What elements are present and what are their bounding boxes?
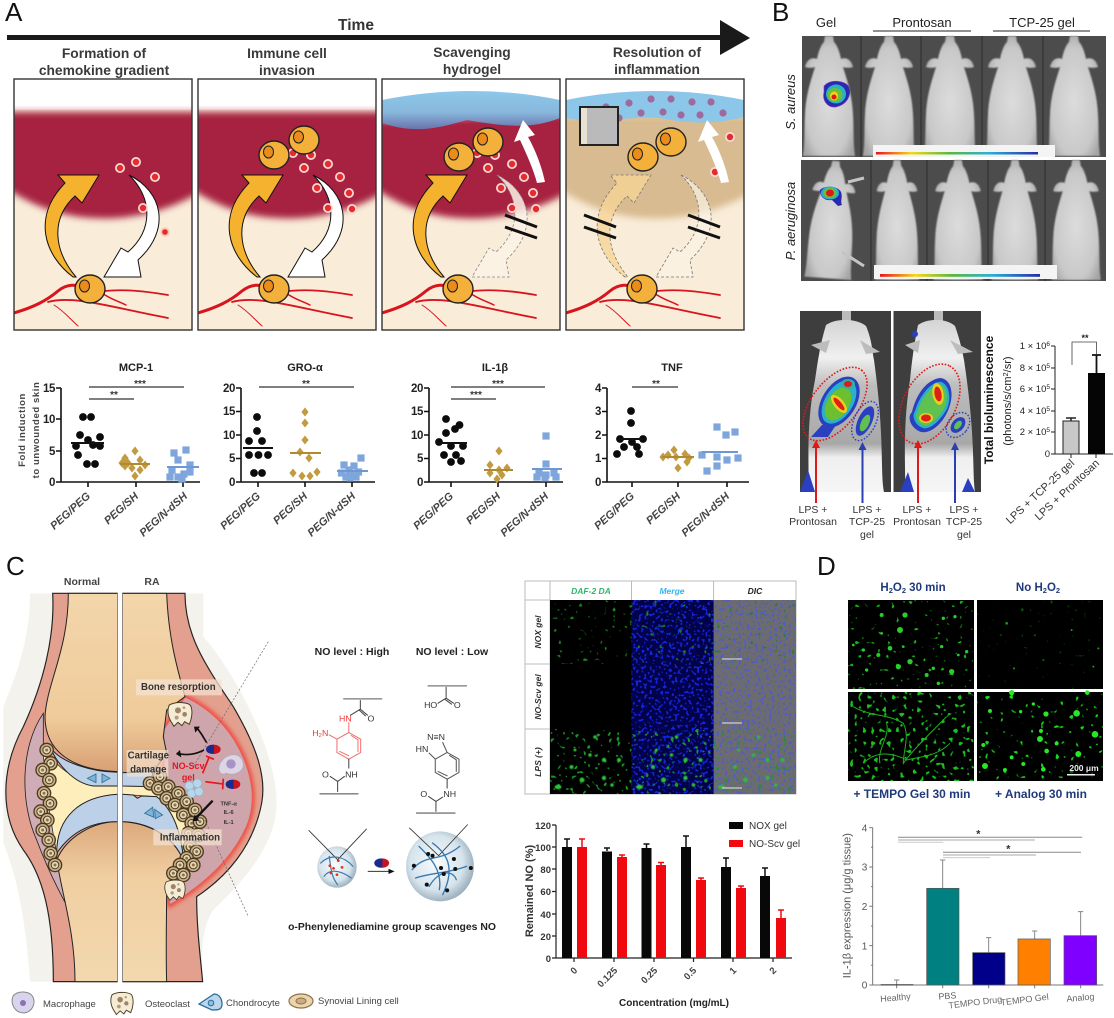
column titles: DAF-2 DA [571,586,611,596]
bar chart: total bioluminescence: 5 [1046,384,1050,391]
heat signal [886,354,975,454]
row titles: LPS (+) [533,747,543,777]
synovium right with inflamed glow [163,697,252,905]
merge column [632,600,714,794]
chart: GRO-alpha: 0 [229,477,235,489]
bones [45,593,185,982]
chondrocytes [87,774,163,819]
chart: TNF: 2 [595,430,601,442]
row titles: NO-Scv gel [533,674,543,720]
chart: GRO-alpha: 15 [223,406,236,418]
bar chart: remained NO: Concentration (mg/mL) [619,998,729,1009]
heading: stage 2: Immune cell [247,46,327,61]
heading: RA: RA [144,576,160,588]
panel: immune cell invasion [188,79,386,330]
image: no H2O2 [977,600,1103,689]
macrophage [219,755,243,774]
bar chart: remained NO: 100 [535,843,551,854]
label: cartilage damage: damage [130,765,167,776]
chart: IL-1 beta: 0 [417,477,423,489]
black bars [562,847,770,958]
image captions top: No H [1016,582,1043,594]
colour bar [874,265,1057,279]
structure: low: HN [416,744,428,754]
bar chart: remained NO: 120 [535,821,551,832]
panel: scavenging hydrogel [372,79,570,330]
chart: GRO-alpha: PEG/N-dSH [305,490,359,539]
structure: high: HN [339,714,352,723]
chart: IL-1 beta: 5 [417,453,424,465]
joint fluid [43,747,187,860]
bar chart: remained NO: 0.125 [596,965,621,990]
chart: MCP-1: PEG/SH [102,490,142,527]
image captions top: 2 [1056,586,1060,595]
chart: GRO-alpha: 5 [229,453,236,465]
cartilage [50,747,183,860]
label C: C [6,551,25,581]
chart: GRO-alpha: PEG/SH [271,490,311,527]
panel B: bioluminescence imaging [772,0,1113,541]
image: H2O2 30 min [848,600,974,689]
chart: IL-1 beta: PEG/N-dSH [498,490,552,539]
legend: cell types: Macrophage [43,999,96,1010]
panel C: rheumatoid arthritis joint and NO scavenging gel [3,551,800,1015]
structure: low: NH [443,789,456,799]
bar chart: total bioluminescence: 5 [1046,406,1050,413]
chart: IL-1 beta: *** [470,390,482,401]
scale bar: 200 μm [1069,763,1099,773]
bar chart: remained NO: 0 [546,954,551,965]
chart: IL-1 beta: 20 [411,383,423,395]
image captions bottom: + TEMPO Gel 30 min [853,787,971,801]
arrow: time axis [7,20,750,55]
image captions: Prontosan [789,516,837,528]
NO molecules [206,745,240,789]
image: LPS mouse right [886,311,981,492]
large gel sphere [406,825,474,901]
label D: D [817,551,836,581]
structure: low [416,686,467,813]
bar chart: total bioluminescence: Total bioluminescence [982,335,996,464]
image captions: gel [860,529,874,541]
image captions top: O [1047,582,1056,594]
chart: GRO-alpha: GRO-α [287,362,323,374]
structure: low: O [420,789,427,799]
bar chart: IL-1 beta: IL-1β expression (μg/g tissue) [842,833,854,978]
bar chart: IL-1 beta: 3 [862,863,868,874]
column headers: Prontosan [892,15,952,30]
structure: low: N≡N [427,732,445,742]
image captions [789,504,982,541]
chart: GRO-alpha [218,362,375,539]
image captions: LPS + [903,504,931,516]
diagram: joint [3,592,277,983]
bar chart: total bioluminescence [982,333,1113,527]
dashed inset line [193,642,268,917]
label: bone resorption: Bone resorption [141,682,216,693]
chart: TNF: PEG/N-dSH [679,490,733,539]
structure: high [312,699,382,794]
bar chart: IL-1 beta: * [976,828,981,840]
chart: TNF: 0 [595,477,601,489]
chart: MCP-1: ** [110,390,118,401]
image captions top: 30 min [906,582,946,594]
panel: resolution of inflammation [556,79,754,330]
heading: stage 3: Scavenging [433,45,511,60]
legend: cell types [12,992,399,1015]
image captions top [880,582,1060,595]
structure: low: O [454,700,461,710]
bar chart: total bioluminescence: 1 × 10 [1020,341,1046,352]
heat signal [820,186,842,206]
column headers [816,15,1090,31]
skin layer right [122,593,263,982]
structure: low: HO [424,700,437,710]
image captions: TCP-25 [946,516,982,528]
gel particle [185,779,203,798]
bar chart: remained NO: 0.25 [639,965,661,986]
headings: NO level: NO level : Low [416,646,489,658]
row titles [533,615,543,777]
bar chart: remained NO [524,821,800,1009]
chart: MCP-1: PEG/N-dSH [137,490,191,539]
osteoclasts in joint [165,703,192,900]
label: cartilage damage [127,750,170,777]
image captions: TCP-25 [849,516,885,528]
bars [881,983,913,986]
image captions: LPS + [950,504,978,516]
column titles: Merge [659,586,685,596]
scale bar [1066,763,1103,779]
significance lines [898,837,1082,858]
bar chart: total bioluminescence: 5 [1046,427,1050,434]
bar chart: IL-1 beta: Healthy [880,991,912,1004]
chart: IL-1 beta: 15 [411,406,424,418]
bar chart: remained NO: 60 [540,887,551,898]
chart: IL-1 beta [411,362,563,539]
bar chart: total bioluminescence: 2 [1001,372,1010,376]
panel A: time course schematic and chemokine charts [4,0,754,539]
bar chart: IL-1 beta: TEMPO Gel [1000,992,1049,1008]
image captions top: 2 [1043,586,1047,595]
image captions top: 2 [902,586,906,595]
headings: NO level: NO level : High [315,646,389,658]
bar chart: IL-1 beta [842,823,1103,1011]
heading: stage 2: invasion [259,63,315,78]
structure: high: O [322,770,329,779]
heading: time: Time [338,17,374,34]
bar chart: remained NO: 80 [540,865,551,876]
column headers: Gel [816,15,836,30]
skin layer left [6,593,118,982]
image: LPS mouse left [790,311,891,492]
column headers: TCP-25 gel [1009,15,1075,30]
chart: GRO-alpha: ** [302,379,310,390]
chart: IL-1 beta: IL-1β [482,362,508,374]
label: NO-Scv gel: NO-Scv [172,761,205,771]
bar chart: remained NO: 1 [728,965,740,977]
image captions: gel [957,529,971,541]
heading: stage 1: chemokine gradient [39,63,170,78]
heading: normal: Normal [64,576,100,588]
bar chart: IL-1 beta: 4 [862,823,868,834]
bar chart: total bioluminescence: LPS + TCP-25 gel [1004,457,1077,527]
DIC column [714,600,796,794]
bar chart: total bioluminescence: 2 × 10 [1020,427,1046,438]
reaction arrow [368,858,395,874]
heading: stage 4: inflammation [614,62,700,77]
label: cartilage damage: Cartilage [128,750,170,761]
heat signal [790,356,884,452]
row titles: NOX gel [533,615,543,649]
chart: IL-1 beta: *** [492,379,504,390]
bar chart: remained NO: 0 [569,965,580,977]
headings: NO level [315,646,489,658]
caption: scavenges NO: o-Phenylenediamine group scavenges NO [288,922,496,933]
structure: high: H₂N [312,728,328,738]
image captions bottom [853,787,1087,801]
synovial cells left [34,743,62,872]
heat signal [824,81,850,107]
synovium left [25,713,68,908]
bar chart: IL-1 beta: PBS [938,990,957,1002]
row label: P. aeruginosa: P. aeruginosa [783,182,798,260]
inhibition and action arrows [177,727,223,817]
y axis label line 2: to unwounded skin [31,382,42,478]
bar chart: IL-1 beta: TEMPO Drug [948,994,1003,1011]
chart: GRO-alpha: 10 [223,430,235,442]
y axis label line 1: Fold induction [17,393,28,467]
chart: MCP-1: 5 [49,446,56,458]
bar chart: total bioluminescence: 5 [1046,363,1050,370]
chart: IL-1 beta: 10 [411,430,423,442]
bar chart: total bioluminescence: (photons/s/cm [1002,376,1014,446]
chart: MCP-1: PEG/PEG [48,490,93,532]
chart: TNF: TNF [661,362,683,374]
legend: cell types: Chondrocyte [226,998,280,1009]
image: TEMPO gel [848,692,974,781]
bar chart: remained NO: 20 [540,932,551,943]
legend: NOX gel [749,821,787,832]
DAF column [550,600,632,794]
bar chart: total bioluminescence: 6 [1046,341,1050,348]
legend: cell types: Osteoclast [145,999,190,1010]
panel: formation of chemokine gradient [4,79,202,330]
bar chart: IL-1 beta: * [1006,844,1011,856]
bar chart: total bioluminescence: /sr) [1002,356,1014,372]
heading: stage 4: Resolution of [613,45,701,60]
heading: stage 1: Formation of [62,46,147,61]
error bars [894,860,1083,985]
chart: TNF: 4 [595,383,602,395]
bar chart: total bioluminescence: LPS + Prontosan [1033,457,1102,523]
label: bone resorption [136,679,222,695]
heading: stage 3: hydrogel [443,62,501,77]
image: analog [977,690,1103,781]
column titles [571,586,763,596]
bar chart: remained NO: 2 [768,965,779,977]
bar chart: remained NO: 0.5 [682,965,700,982]
red bars [577,847,786,958]
chart: GRO-alpha: 20 [223,383,235,395]
label: cytokines: TNF-α [220,801,237,807]
image row: S. aureus mice [802,36,1106,157]
fluorescence image grid [525,581,796,794]
image captions: LPS + [799,504,827,516]
chart: GRO-alpha: PEG/PEG [218,490,263,532]
legend: NO-Scv gel [749,839,800,850]
arrows: red and blue markers [812,440,959,503]
small gel sphere [309,829,366,888]
chart: IL-1 beta: PEG/SH [464,490,504,527]
chart: IL-1 beta: PEG/PEG [411,490,456,532]
bar chart: remained NO: 40 [540,910,551,921]
bar chart: IL-1 beta: 0 [862,981,868,992]
chart: TNF: ** [652,379,660,390]
image captions top: O [893,582,902,594]
label: inflammation: Inflammation [160,833,220,844]
bar chart: IL-1 beta: 2 [862,902,868,913]
bar chart: remained NO: Remained NO (%) [524,845,536,937]
synovial pannus right [143,770,207,882]
chemical structures [309,686,474,901]
image captions: LPS + [853,504,881,516]
bar chart: IL-1 beta: Analog [1066,991,1095,1004]
label: inflammation [153,829,222,845]
structure: high: O [367,714,375,723]
image captions bottom: + Analog 30 min [995,787,1087,801]
inset square [580,107,618,145]
legend [729,821,800,850]
chart: TNF: 3 [595,406,601,418]
legend: cell types: Synovial Lining cell [318,996,399,1007]
label: cytokines: IL-1 [224,820,234,826]
chart: MCP-1: MCP-1 [119,362,153,374]
label: cytokines: IL-6 [224,810,234,816]
chart: TNF: PEG/PEG [592,490,637,532]
bar chart: IL-1 beta: 1 [862,941,868,952]
image captions: Prontosan [893,516,941,528]
bar chart: total bioluminescence: 8 × 10 [1020,363,1046,374]
row label: S. aureus: S. aureus [783,74,798,130]
structure: high: NH [345,770,358,779]
column titles: DIC [748,586,763,596]
image captions top: H [880,582,889,594]
chart: TNF [592,362,749,539]
bar chart: total bioluminescence: ** [1081,333,1089,343]
chart: MCP-1: 10 [43,414,55,426]
image row: P. aeruginosa mice [801,159,1106,281]
chart: TNF: PEG/SH [644,490,684,527]
label: NO-Scv gel: gel [182,773,195,783]
bar chart: total bioluminescence: 0 [1045,449,1050,460]
chart: MCP-1: 0 [49,477,55,489]
bar chart: total bioluminescence: 6 × 10 [1020,384,1046,395]
chart: MCP-1 [43,362,200,539]
image captions top: 2 [889,586,893,595]
white divider [118,592,122,983]
panel D: fluorescence and IL-1 beta expression [817,551,1103,1011]
bar chart: total bioluminescence: 4 × 10 [1020,406,1046,417]
chart: TNF: 1 [595,453,602,465]
chart: MCP-1: 15 [43,383,56,395]
colour bar [873,145,1055,157]
chart: MCP-1: *** [134,379,146,390]
